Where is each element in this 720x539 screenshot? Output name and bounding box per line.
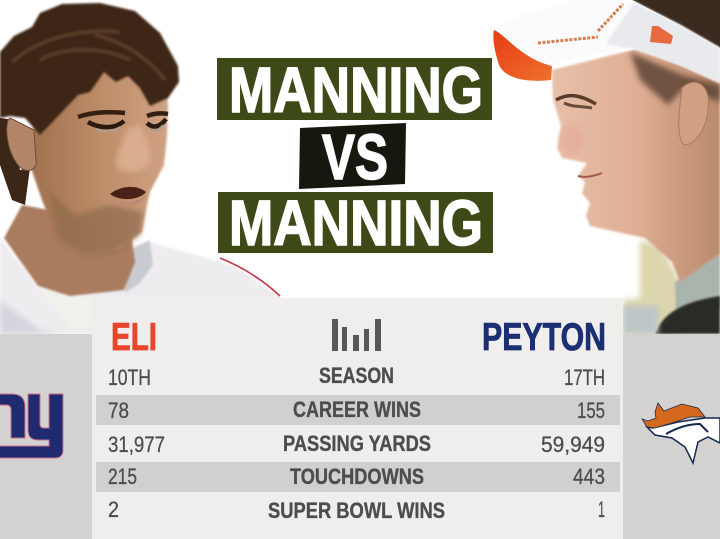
row: passing yards: PASSING YARDS [283, 431, 431, 456]
row: career wins: 78 [108, 398, 129, 423]
background blur [623, 240, 690, 334]
nose [116, 125, 150, 171]
cap stitching [538, 4, 623, 43]
panel: right side with Broncos logo [623, 334, 720, 539]
heading: Peyton: PEYTON [482, 316, 606, 359]
shirt [675, 253, 720, 310]
row: season: 17TH [564, 365, 605, 390]
nose shading [560, 124, 584, 156]
title bar: vs: VS [322, 121, 388, 193]
row: touchdowns: 215 [108, 464, 137, 489]
panel: stats table [92, 298, 623, 539]
row: passing yards: 31,977 [108, 432, 165, 457]
hair highlights [12, 31, 165, 80]
jersey [0, 238, 282, 334]
eye [564, 103, 592, 108]
row: career wins: CAREER WINS [293, 397, 421, 422]
row: career wins: 155 [577, 398, 605, 423]
title block [217, 54, 493, 259]
face and neck [552, 48, 720, 282]
lower lip [112, 195, 146, 206]
row: super bowl wins: SUPER BOWL WINS [268, 498, 445, 523]
logo: Denver Broncos [642, 403, 720, 463]
logo: NY Giants [0, 394, 63, 458]
cap crown [493, 0, 720, 83]
title bar: manning 2: MANNING [229, 187, 483, 259]
ear [7, 118, 36, 170]
ear [679, 82, 709, 145]
jersey stripe [220, 258, 280, 296]
grey blur [623, 306, 658, 334]
row stripe: touchdowns [96, 462, 620, 492]
panel: left side with Giants logo [0, 334, 93, 539]
eyes [88, 119, 166, 127]
neck [4, 205, 135, 296]
row: season [108, 363, 605, 390]
mouth [110, 187, 146, 199]
heading: Eli: ELI [111, 316, 157, 359]
row: super bowl wins: 1 [598, 497, 605, 522]
eyebrow [556, 96, 596, 104]
cap band [606, 3, 720, 83]
row: passing yards [108, 431, 605, 457]
cap brim [493, 30, 552, 81]
jersey shading [0, 300, 60, 334]
row: touchdowns: 443 [573, 464, 605, 489]
row: career wins [108, 397, 605, 423]
photo: Peyton Manning [493, 0, 720, 334]
face [30, 70, 168, 256]
mouth [578, 173, 602, 177]
eyebrows [78, 112, 168, 117]
stubble [48, 190, 143, 256]
row: super bowl wins [108, 497, 605, 523]
cap logo [650, 26, 673, 44]
eye whites [96, 125, 163, 131]
undershirt [38, 288, 92, 330]
row: super bowl wins: 2 [108, 497, 119, 522]
back hair [0, 118, 30, 205]
row: passing yards: 59,949 [541, 432, 605, 457]
photo: Eli Manning [0, 3, 282, 334]
foreground blur dark [655, 296, 720, 334]
title bar: manning 1: MANNING [229, 54, 483, 126]
hair [632, 0, 720, 48]
row: season: SEASON [319, 363, 394, 388]
icon: bar chart [332, 319, 381, 351]
jersey collar [125, 240, 153, 293]
row: touchdowns [108, 464, 605, 489]
side hair [630, 52, 720, 105]
row stripe: career wins [96, 395, 620, 425]
hair [0, 3, 179, 135]
row: touchdowns: TOUCHDOWNS [290, 464, 424, 489]
row: season: 10TH [108, 365, 151, 390]
